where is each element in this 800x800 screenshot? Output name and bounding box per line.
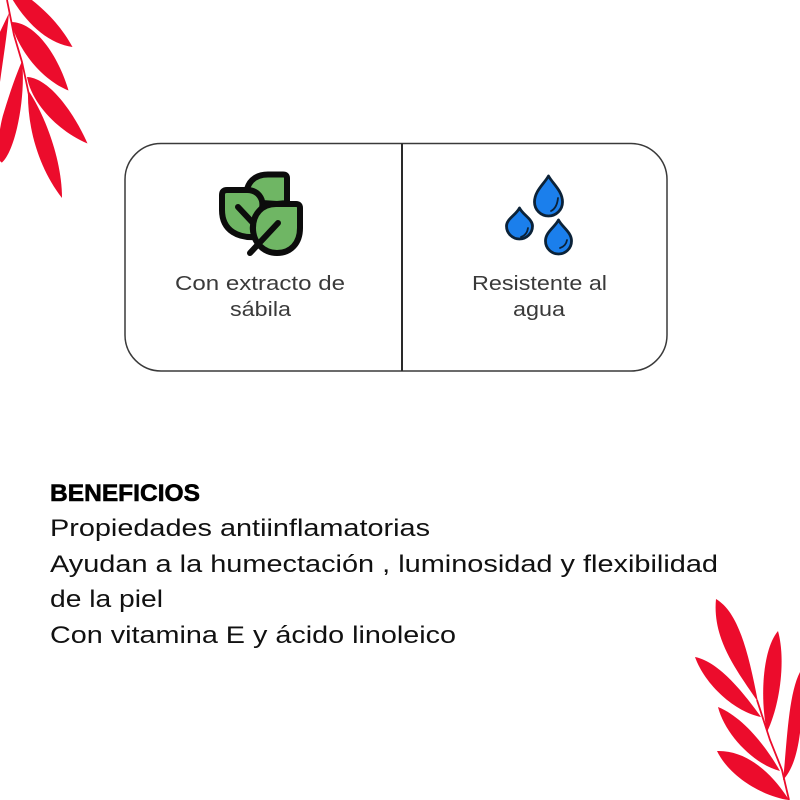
text block: beneficios [50, 480, 718, 649]
label: con extracto de sábila: Con extracto de [175, 273, 345, 295]
heading: beneficios: BENEFICIOS [50, 480, 200, 507]
panel outline [125, 144, 667, 371]
decoration: red leaves top left [0, 0, 88, 198]
label: resistente al agua [472, 273, 607, 321]
panel: product features [125, 144, 667, 371]
divider between features [401, 144, 403, 371]
label: con extracto de sábila: sábila [230, 299, 292, 321]
benefit list: Con vitamina E y ácido linoleico [50, 622, 456, 649]
label: resistente al agua: agua [513, 299, 566, 321]
label: con extracto de sábila [175, 273, 345, 321]
benefit list [50, 515, 718, 649]
icon: green leaves [222, 174, 300, 253]
label: resistente al agua: Resistente al [472, 273, 607, 295]
decoration: red leaves bottom right [695, 599, 800, 800]
benefit list: Ayudan a la humectación , luminosidad y flexibilidad [50, 551, 718, 578]
icon: blue water drops [506, 176, 572, 254]
benefit list: Propiedades antiinflamatorias [50, 515, 430, 542]
benefit list: de la piel [50, 586, 163, 613]
